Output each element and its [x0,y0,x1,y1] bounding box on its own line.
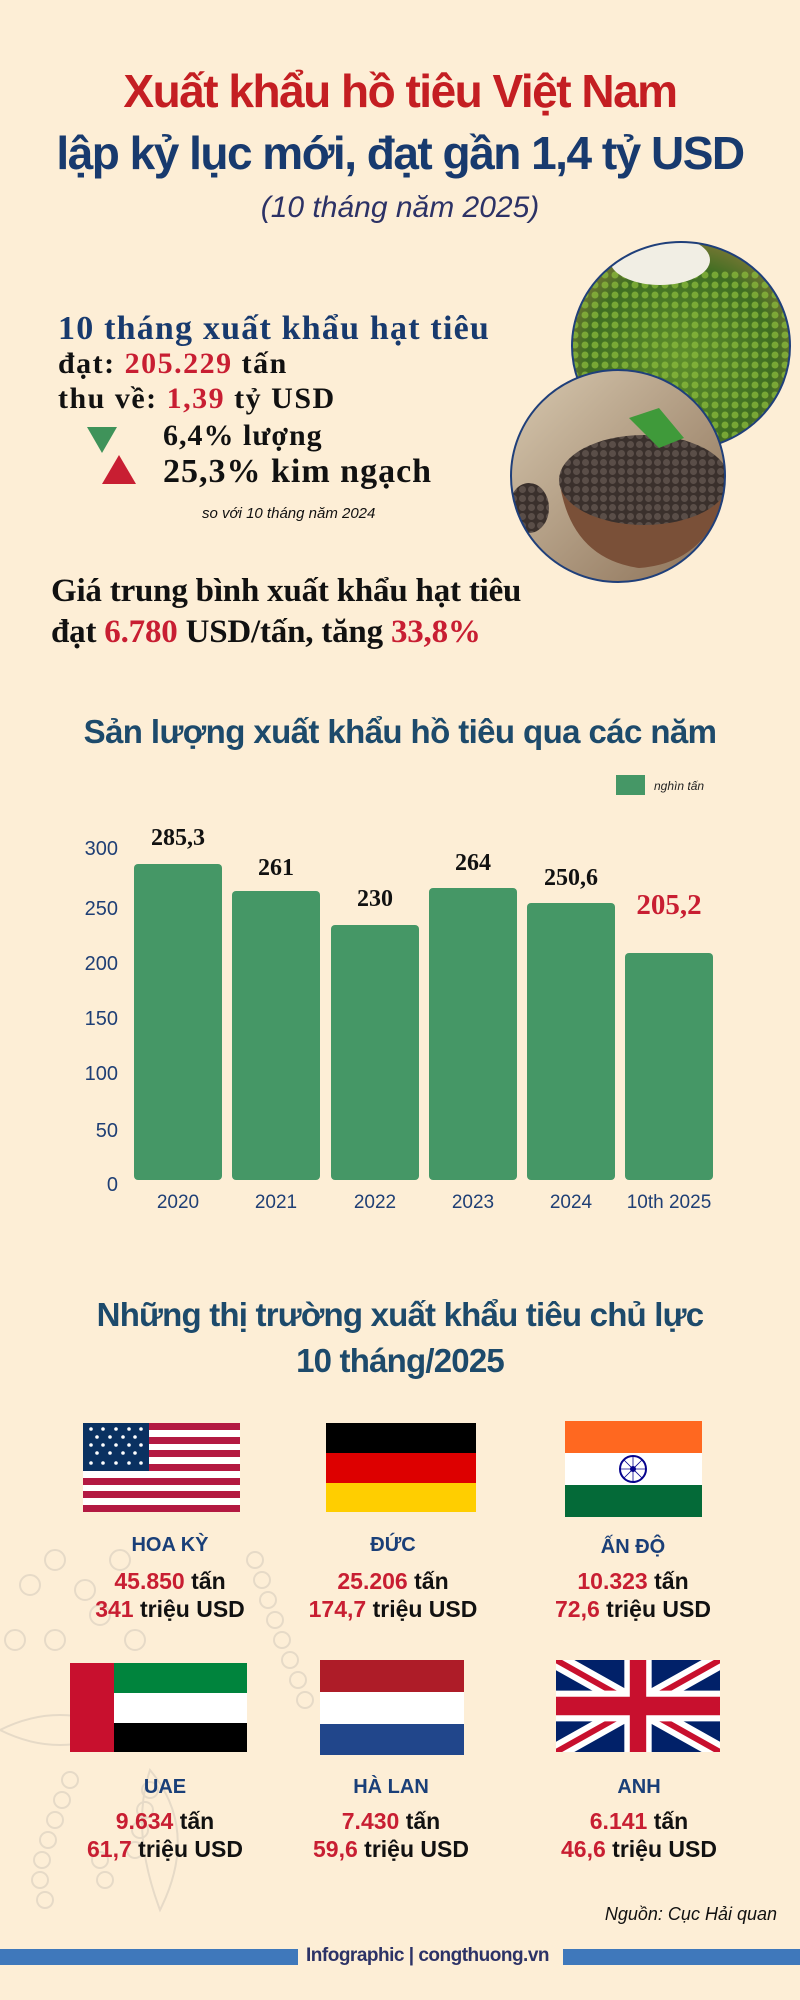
y axis labels: 100 [85,1063,118,1085]
value labels: 230 [357,886,393,912]
flag: USA [83,1423,240,1512]
market: Duc: 174,7 triệu USD [309,1596,477,1622]
value labels: 205,2 [636,889,702,921]
market: Duc: 25.206 tấn [337,1568,449,1594]
value labels: 250,6 [544,865,598,891]
market: An Do: ẤN ĐỘ [601,1536,665,1558]
flag: UAE [70,1663,247,1752]
average price [51,573,521,650]
value labels: 264 [455,850,491,876]
bar chart [85,775,713,1213]
x labels: 2022 [354,1192,396,1213]
market: Anh: 6.141 tấn [590,1808,688,1834]
footer [0,1945,800,1966]
average price: Giá trung bình xuất khẩu hạt tiêu [51,573,521,609]
market: Anh [561,1776,717,1862]
market: Ha Lan [313,1775,469,1862]
stats block: 10 tháng xuất khẩu hạt tiêu [58,310,490,347]
note: so với 10 tháng năm 2024 [202,505,375,522]
market: Hoa Ky: 341 triệu USD [95,1596,245,1622]
x labels: 2023 [452,1192,494,1213]
flag: UK [556,1660,720,1752]
value labels: 261 [258,855,294,881]
market: Hoa Ky: HOA KỲ [131,1534,209,1556]
market: An Do [555,1534,711,1622]
title [56,65,744,179]
markets heading [97,1296,704,1379]
market: Hoa Ky: 45.850 tấn [114,1568,226,1594]
title: Xuất khẩu hồ tiêu Việt Nam [123,65,677,117]
flag: India [565,1421,702,1517]
market: Ha Lan: 7.430 tấn [342,1808,440,1834]
y axis labels: 250 [85,898,118,920]
x labels: 2024 [550,1192,593,1213]
decorative pepper illustration [0,1549,314,1912]
value labels [151,825,702,921]
y axis labels: 0 [107,1174,118,1196]
stats block: đạt: 205.229 tấn [58,347,288,380]
flag: Netherlands [320,1660,464,1755]
market: Ha Lan: 59,6 triệu USD [313,1836,469,1862]
legend [616,775,704,795]
subtitle: (10 tháng năm 2025) [261,191,539,224]
stats block [58,310,490,415]
market: Anh: ANH [617,1776,661,1798]
icon: up triangle [102,455,136,484]
markets heading: 10 tháng/2025 [296,1342,504,1379]
value labels: 285,3 [151,825,205,851]
x labels: 2021 [255,1192,297,1213]
photo: green pepper [571,241,791,444]
market: Hoa Ky [95,1532,245,1622]
market: An Do: 72,6 triệu USD [555,1596,711,1622]
x labels: 10th 2025 [627,1192,711,1213]
source: Nguồn: Cục Hải quan [605,1904,777,1924]
average price: đạt 6.780 USD/tấn, tăng 33,8% [51,614,481,650]
icon: down triangle [87,427,117,453]
text: 25,3% kim ngạch: 25,3% kim ngạch [163,453,432,490]
photo: black pepper bowl [510,369,726,583]
flag: Germany [326,1423,476,1512]
market: An Do: 10.323 tấn [577,1568,689,1594]
market: UAE: UAE [144,1776,186,1798]
y axis labels [85,838,118,1196]
y axis labels: 50 [96,1120,118,1142]
y axis labels: 200 [85,953,118,975]
chart title: Sản lượng xuất khẩu hồ tiêu qua các năm [84,713,716,750]
market: Anh: 46,6 triệu USD [561,1836,717,1862]
y axis labels: 300 [85,838,118,860]
market: UAE [87,1776,243,1862]
y axis labels: 150 [85,1008,118,1030]
stats block: thu về: 1,39 tỷ USD [58,382,336,415]
x labels: 2020 [157,1192,199,1213]
market: Duc [309,1532,477,1622]
market: UAE: 61,7 triệu USD [87,1836,243,1862]
markets heading: Những thị trường xuất khẩu tiêu chủ lực [97,1296,703,1333]
market: Duc: ĐỨC [370,1534,416,1556]
x labels [157,1192,711,1213]
market: UAE: 9.634 tấn [116,1808,214,1834]
legend: nghìn tấn [654,779,704,793]
market: Ha Lan: HÀ LAN [353,1776,429,1798]
text: 6,4% lượng: 6,4% lượng [163,419,323,452]
footer: Infographic | congthuong.vn [306,1945,549,1966]
bars [134,864,713,1180]
title: lập kỷ lục mới, đạt gần 1,4 tỷ USD [56,127,744,179]
